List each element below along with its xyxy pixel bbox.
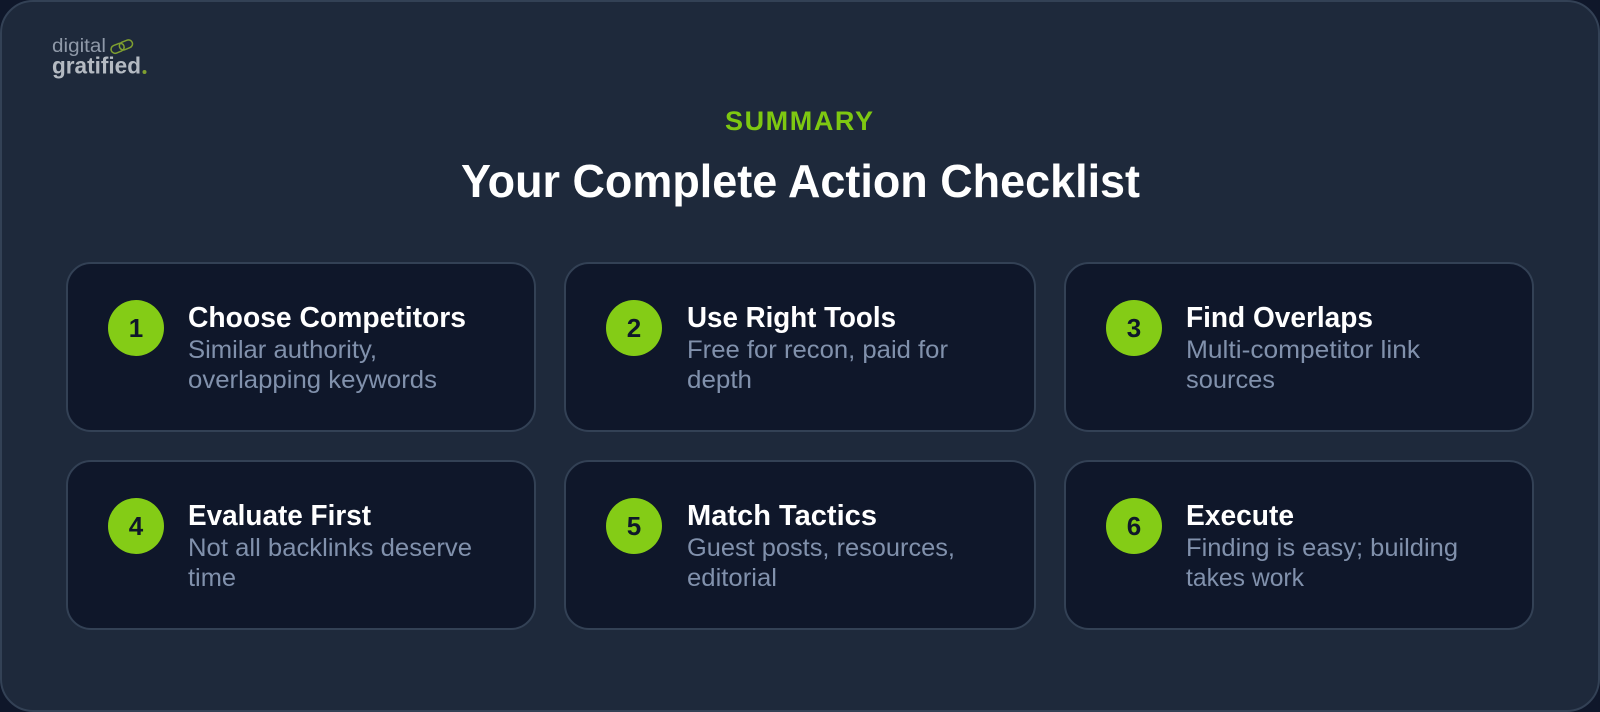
card 4 heading: Evaluate First bbox=[188, 500, 371, 532]
card 2 description bbox=[687, 336, 948, 394]
card 2 description: Free for recon, paid for bbox=[687, 336, 948, 364]
card 5 description: Guest posts, resources, bbox=[687, 534, 955, 562]
number badge 2 bbox=[606, 300, 662, 356]
card 4: evaluate first bbox=[67, 461, 535, 629]
card 6 heading: Execute bbox=[1186, 500, 1294, 532]
card 1 description: overlapping keywords bbox=[188, 366, 437, 394]
number badge 3: 3 bbox=[1127, 313, 1141, 343]
card 2 description: depth bbox=[687, 366, 752, 394]
number badge 1: 1 bbox=[129, 313, 143, 343]
card 2 heading: Use Right Tools bbox=[687, 302, 896, 334]
number badge 6: 6 bbox=[1127, 511, 1141, 541]
card 4 description: Not all backlinks deserve bbox=[188, 534, 472, 562]
logo: digital gratified: gratified bbox=[52, 52, 141, 78]
number badge 6 bbox=[1106, 498, 1162, 554]
card 6: execute bbox=[1065, 461, 1533, 629]
card 2: use right tools bbox=[565, 263, 1035, 431]
card 5 description: editorial bbox=[687, 564, 777, 592]
logo: digital gratified bbox=[52, 36, 146, 78]
card 3: find overlaps bbox=[1065, 263, 1533, 431]
card 1 heading: Choose Competitors bbox=[188, 302, 466, 334]
card 5: match tactics bbox=[565, 461, 1035, 629]
number badge 5: 5 bbox=[627, 511, 641, 541]
card 6 description: takes work bbox=[1186, 564, 1304, 592]
card 4 description bbox=[188, 534, 472, 592]
card 6 description: Finding is easy; building bbox=[1186, 534, 1458, 562]
card 1 description: Similar authority, bbox=[188, 336, 377, 364]
eyebrow: summary: SUMMARY bbox=[725, 106, 873, 136]
card 5 heading: Match Tactics bbox=[687, 500, 877, 532]
card 1 description bbox=[188, 336, 437, 394]
card 6 description bbox=[1186, 534, 1458, 592]
card 3 description bbox=[1186, 336, 1421, 394]
number badge 4 bbox=[108, 498, 164, 554]
title: Your Complete Action Checklist bbox=[461, 155, 1140, 207]
card 3 heading: Find Overlaps bbox=[1186, 302, 1373, 334]
number badge 3 bbox=[1106, 300, 1162, 356]
card 1: choose competitors bbox=[67, 263, 535, 431]
logo: digital gratified: digital bbox=[52, 36, 106, 57]
number badge 2: 2 bbox=[627, 313, 641, 343]
number badge 5 bbox=[606, 498, 662, 554]
card 3 description: Multi-competitor link bbox=[1186, 336, 1421, 364]
icon: chain link bbox=[110, 39, 134, 55]
number badge 4: 4 bbox=[129, 511, 144, 541]
card 4 description: time bbox=[188, 564, 236, 592]
number badge 1 bbox=[108, 300, 164, 356]
card 5 description bbox=[687, 534, 955, 592]
card 3 description: sources bbox=[1186, 366, 1275, 394]
